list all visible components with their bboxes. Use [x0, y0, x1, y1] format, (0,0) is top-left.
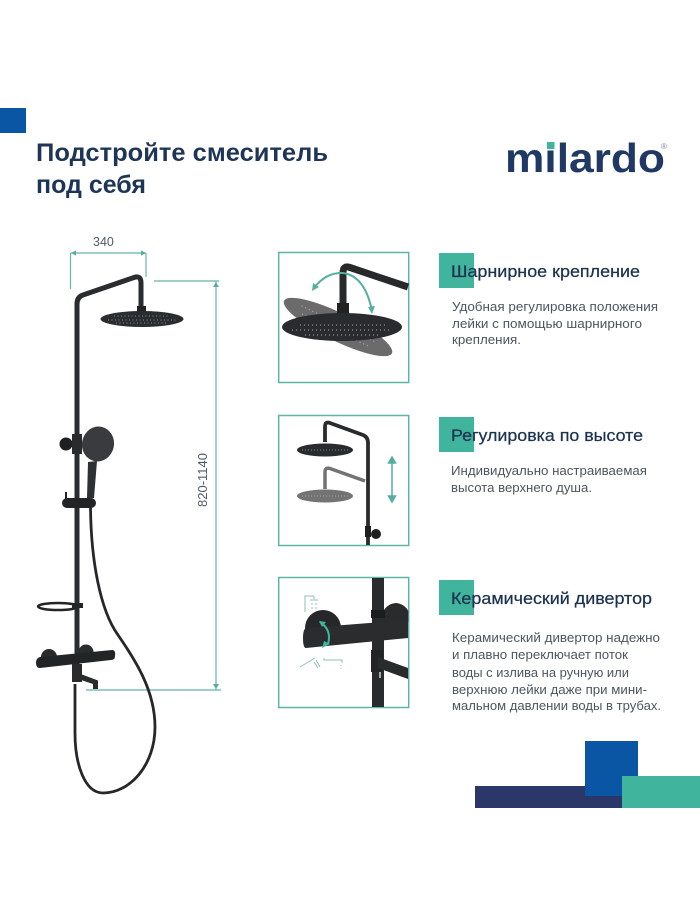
lowered grey shower — [297, 468, 365, 502]
heading: Шарнирное крепление — [451, 263, 640, 281]
thermostat mixer with spout — [36, 644, 115, 689]
description: лейки с помощью шарнирного — [452, 316, 642, 331]
description: мальном давлении воды в трубах. — [452, 698, 661, 713]
icon: spout — [324, 658, 342, 669]
panel: height adjustment illustration — [279, 416, 409, 546]
riser pipe and overhead arm — [77, 277, 141, 681]
icon: overhead shower — [305, 596, 318, 612]
decorative colour blocks — [475, 741, 700, 808]
teal tag — [439, 417, 474, 452]
hose — [75, 507, 155, 793]
holder knob — [365, 526, 381, 539]
description: Удобная регулировка положения — [452, 299, 658, 314]
valve body and pipes — [303, 578, 408, 707]
main head — [282, 313, 402, 341]
description: воды с излива на ручную или — [452, 665, 629, 680]
description: Индивидуально настраиваемая — [451, 463, 647, 478]
dimension: width 340: 340 — [93, 235, 114, 249]
description: и плавно переключает поток — [452, 647, 628, 662]
teal tag — [439, 253, 474, 288]
heading: Керамический дивертор — [451, 590, 652, 608]
description — [452, 630, 661, 713]
section: height adjustment — [439, 417, 647, 495]
tilted grey head — [278, 288, 398, 366]
teal tag — [439, 580, 474, 615]
product diagram: shower system with dimensions — [36, 235, 221, 793]
section: ceramic diverter — [439, 580, 661, 713]
description — [452, 299, 658, 347]
panel: diverter illustration — [279, 578, 409, 708]
logo: milardo: milardo — [505, 135, 665, 181]
description: верхнюю лейки даже при мини- — [452, 682, 647, 697]
description: крепления. — [452, 332, 521, 347]
title: под себя — [36, 171, 146, 199]
title: Подстройте смеситель — [36, 139, 328, 167]
heading: Регулировка по высоте — [451, 427, 643, 445]
dimension: width 340 — [70, 235, 146, 289]
overhead shower head — [100, 306, 184, 327]
up and down arrow — [388, 457, 396, 502]
dimension: height 820-1140 — [86, 281, 221, 690]
rotation arrows — [312, 273, 375, 314]
soap dish — [38, 603, 83, 610]
dimension: height 820-1140: 820-1140 — [196, 453, 210, 507]
hand shower and holder — [60, 424, 117, 508]
icon: hand shower — [300, 658, 320, 668]
corner accent square — [0, 108, 26, 133]
description: высота верхнего душа. — [451, 480, 592, 495]
teal rotation arrow — [319, 621, 330, 648]
panel: swivel mount illustration — [278, 252, 409, 382]
section: swivel mount — [439, 253, 658, 347]
title — [36, 139, 328, 199]
arm — [343, 267, 408, 308]
description — [451, 463, 647, 495]
description: Керамический дивертор надежно — [452, 630, 660, 645]
raised black shower — [297, 422, 368, 545]
logo: milardo: ® — [661, 142, 667, 151]
